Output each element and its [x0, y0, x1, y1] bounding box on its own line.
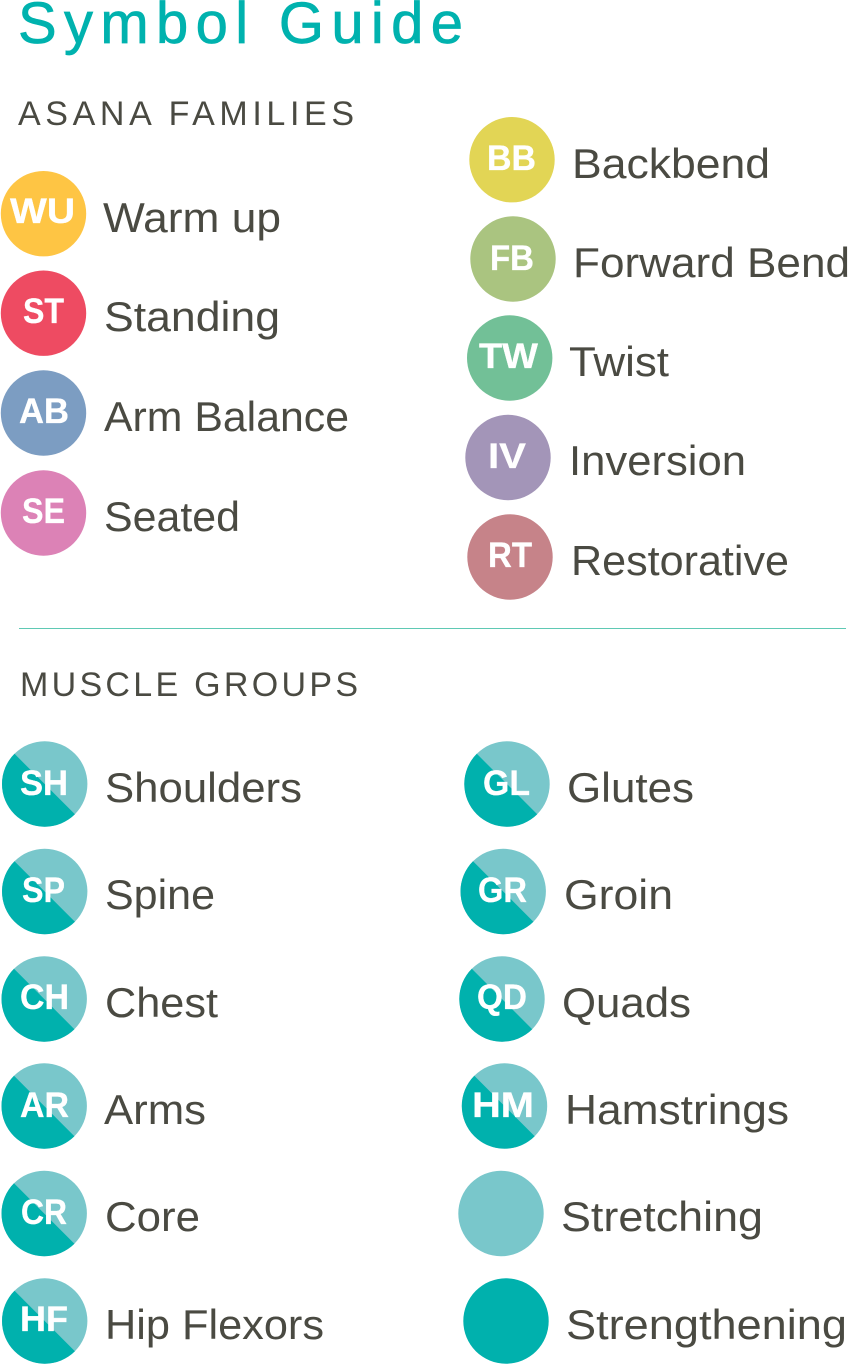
legend item: backbend: BB: [487, 139, 536, 178]
legend item: arms: AR: [20, 1086, 69, 1125]
legend item: glutes: Glutes: [567, 764, 694, 811]
legend item: inversion: IV: [488, 437, 527, 476]
legend item: warm up: WU: [10, 192, 75, 231]
legend item: forward bend: Forward Bend: [573, 239, 849, 286]
legend item: chest: CH: [20, 978, 69, 1017]
heading: muscle groups: MUSCLE GROUPS: [20, 666, 358, 704]
legend item: backbend: [469, 117, 770, 202]
legend item: warm up: [1, 171, 281, 256]
legend item: shoulders: [2, 741, 302, 827]
heading: asana families: ASANA FAMILIES: [18, 95, 354, 133]
legend item: glutes: [464, 741, 694, 827]
legend item: arm balance: [1, 370, 349, 456]
legend item: groin: [460, 849, 673, 934]
legend item: glutes: GL: [483, 764, 530, 803]
legend item: standing: ST: [23, 292, 64, 331]
legend item: arms: Arms: [104, 1086, 206, 1133]
legend item: groin: Groin: [564, 871, 673, 918]
legend item: warm up: Warm up: [103, 194, 281, 241]
legend item: shoulders: Shoulders: [105, 764, 302, 811]
legend item: strengthening: [463, 1278, 847, 1364]
legend item: shoulders: SH: [20, 764, 68, 803]
legend item: strengthening: Strengthening: [566, 1301, 847, 1348]
legend item: hip flexors: Hip Flexors: [105, 1301, 324, 1348]
legend item: spine: [2, 849, 215, 934]
legend item: spine: SP: [22, 871, 65, 910]
legend item: hamstrings: Hamstrings: [565, 1086, 789, 1133]
legend item: core: CR: [21, 1193, 67, 1232]
legend item: seated: [1, 470, 240, 556]
legend item: groin: GR: [478, 871, 527, 910]
legend item: standing: Standing: [104, 293, 280, 340]
legend item: chest: Chest: [105, 979, 218, 1026]
legend item: quads: QD: [477, 978, 527, 1017]
legend item: twist: Twist: [569, 338, 669, 385]
legend item: hip flexors: HF: [20, 1300, 68, 1339]
legend item: hip flexors: [2, 1278, 324, 1364]
legend item: spine: Spine: [105, 871, 215, 918]
legend item: arms: [1, 1063, 206, 1149]
legend item: core: Core: [105, 1193, 200, 1240]
legend item: chest: [1, 956, 218, 1042]
legend item: twist: TW: [479, 337, 538, 376]
legend item: twist: [467, 315, 669, 401]
legend item: quads: [459, 956, 691, 1042]
legend item: backbend: Backbend: [572, 140, 770, 187]
legend item: restorative: Restorative: [571, 537, 789, 584]
legend item: arm balance: Arm Balance: [104, 393, 349, 440]
legend item: stretching: [458, 1171, 763, 1256]
legend item: inversion: [465, 415, 746, 500]
legend item: core: [2, 1171, 200, 1256]
legend item: hamstrings: HM: [472, 1086, 534, 1125]
legend item: arm balance: AB: [19, 392, 69, 431]
legend item: standing: [1, 270, 280, 356]
legend item: stretching: Stretching: [561, 1193, 763, 1240]
legend item: quads: Quads: [562, 979, 691, 1026]
legend item: hamstrings: [462, 1063, 789, 1149]
legend item: seated: SE: [22, 492, 65, 531]
legend item: seated: Seated: [104, 493, 240, 540]
legend item: restorative: [467, 514, 789, 600]
legend item: restorative: RT: [488, 536, 532, 575]
legend item: forward bend: [470, 216, 849, 302]
legend item: inversion: Inversion: [569, 437, 746, 484]
legend item: forward bend: FB: [490, 239, 534, 278]
